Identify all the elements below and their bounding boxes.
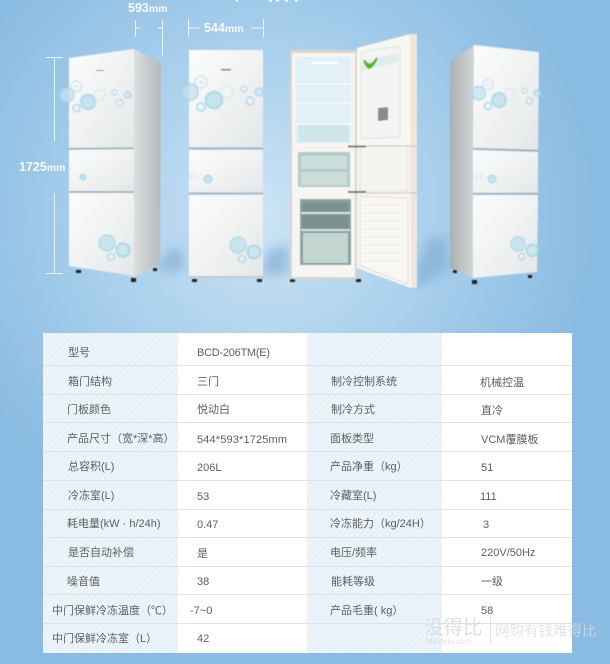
column 1 labels: 中门保鲜冷冻温度（℃） [52, 603, 173, 617]
column 1 labels: 耗电量(kW · h/24h) [67, 517, 161, 530]
watermark: Meidebi.com [426, 637, 472, 646]
column 4 values: VCM覆膜板 [481, 432, 538, 446]
dimension label: width 544mm: 544mm [204, 21, 244, 35]
column 3 labels [330, 374, 431, 617]
column 4 values: 58 [481, 605, 493, 617]
column 3 labels: 面板类型 [330, 431, 374, 445]
column 3 labels: 电压/频率 [330, 545, 377, 559]
column 1 labels: 中门保鲜冷冻室（L） [52, 631, 157, 645]
column 4 values: 一级 [481, 575, 503, 588]
column 1 labels [52, 345, 175, 645]
column 3 labels: 制冷方式 [331, 402, 375, 416]
column 4 values: 机械控温 [480, 375, 524, 389]
column 3 labels: 冷冻能力（kg/24H） [330, 516, 431, 530]
watermark: 没得比 [424, 617, 483, 639]
column 2 values: 38 [197, 576, 209, 588]
column 4 values: 220V/50Hz [481, 547, 535, 559]
dimension label: height 1725mm [19, 58, 66, 274]
column 2 values: 206L [197, 462, 221, 474]
column 2 values: -7~0 [190, 605, 212, 617]
column 2 values [190, 347, 287, 645]
fresh compartment [296, 57, 351, 143]
middle compartment [298, 152, 350, 187]
column 1 labels: 产品尺寸（宽*深*高） [67, 431, 175, 445]
column 1 labels: 总容积(L) [68, 459, 114, 473]
dimension label: height 1725mm: 1725mm [19, 160, 66, 174]
column 3 labels: 制冷控制系统 [331, 374, 397, 388]
floor shadows [160, 236, 448, 288]
column 2 values: 42 [197, 633, 209, 645]
column 2 values: 53 [197, 491, 209, 503]
column 1 labels: 型号 [68, 345, 90, 359]
fridge 4: rear three-quarter view [450, 45, 541, 284]
dimension label: depth 593mm [128, 1, 168, 55]
column 1 labels: 噪音值 [67, 574, 100, 588]
dimension label: depth 593mm: 593mm [128, 1, 168, 15]
column 2 values: 544*593*1725mm [197, 434, 287, 446]
fridge 1: three-quarter view [60, 49, 161, 282]
column 3 labels: 冷藏室(L) [330, 488, 376, 502]
watermark [424, 615, 596, 646]
column 3 labels: 能耗等级 [331, 574, 375, 588]
column 3 labels: 产品净重（kg） [330, 459, 408, 473]
column 3 labels: 产品毛重( kg） [330, 603, 403, 617]
column 1 labels: 箱门结构 [68, 374, 112, 388]
column 2 values: 悦动白 [197, 402, 230, 416]
column 2 values: 三门 [197, 374, 219, 388]
fridge 2: front view [182, 50, 263, 282]
column 4 values: 直冷 [481, 403, 503, 417]
column 4 values [480, 375, 538, 617]
column 4 values: 51 [481, 462, 493, 474]
column 2 values: 是 [197, 547, 208, 560]
specification table [43, 333, 572, 653]
freezer compartment [300, 199, 351, 265]
column 1 labels: 门板颜色 [67, 402, 111, 416]
fridge 3: open view [290, 34, 417, 288]
watermark: 网购有钱难得比 [495, 623, 596, 640]
column 2 values: 0.47 [197, 519, 218, 531]
column 4 values: 3 [483, 519, 489, 531]
heading remnant at top edge [236, 0, 298, 2]
column 4 values: 111 [480, 491, 497, 503]
open door [348, 34, 417, 288]
dimension label: width 544mm [188, 19, 264, 37]
label column fills [43, 333, 442, 653]
column 1 labels: 是否自动补偿 [68, 545, 134, 559]
column 1 labels: 冷冻室(L) [68, 488, 114, 502]
column 2 values: BCD-206TM(E) [197, 347, 270, 359]
